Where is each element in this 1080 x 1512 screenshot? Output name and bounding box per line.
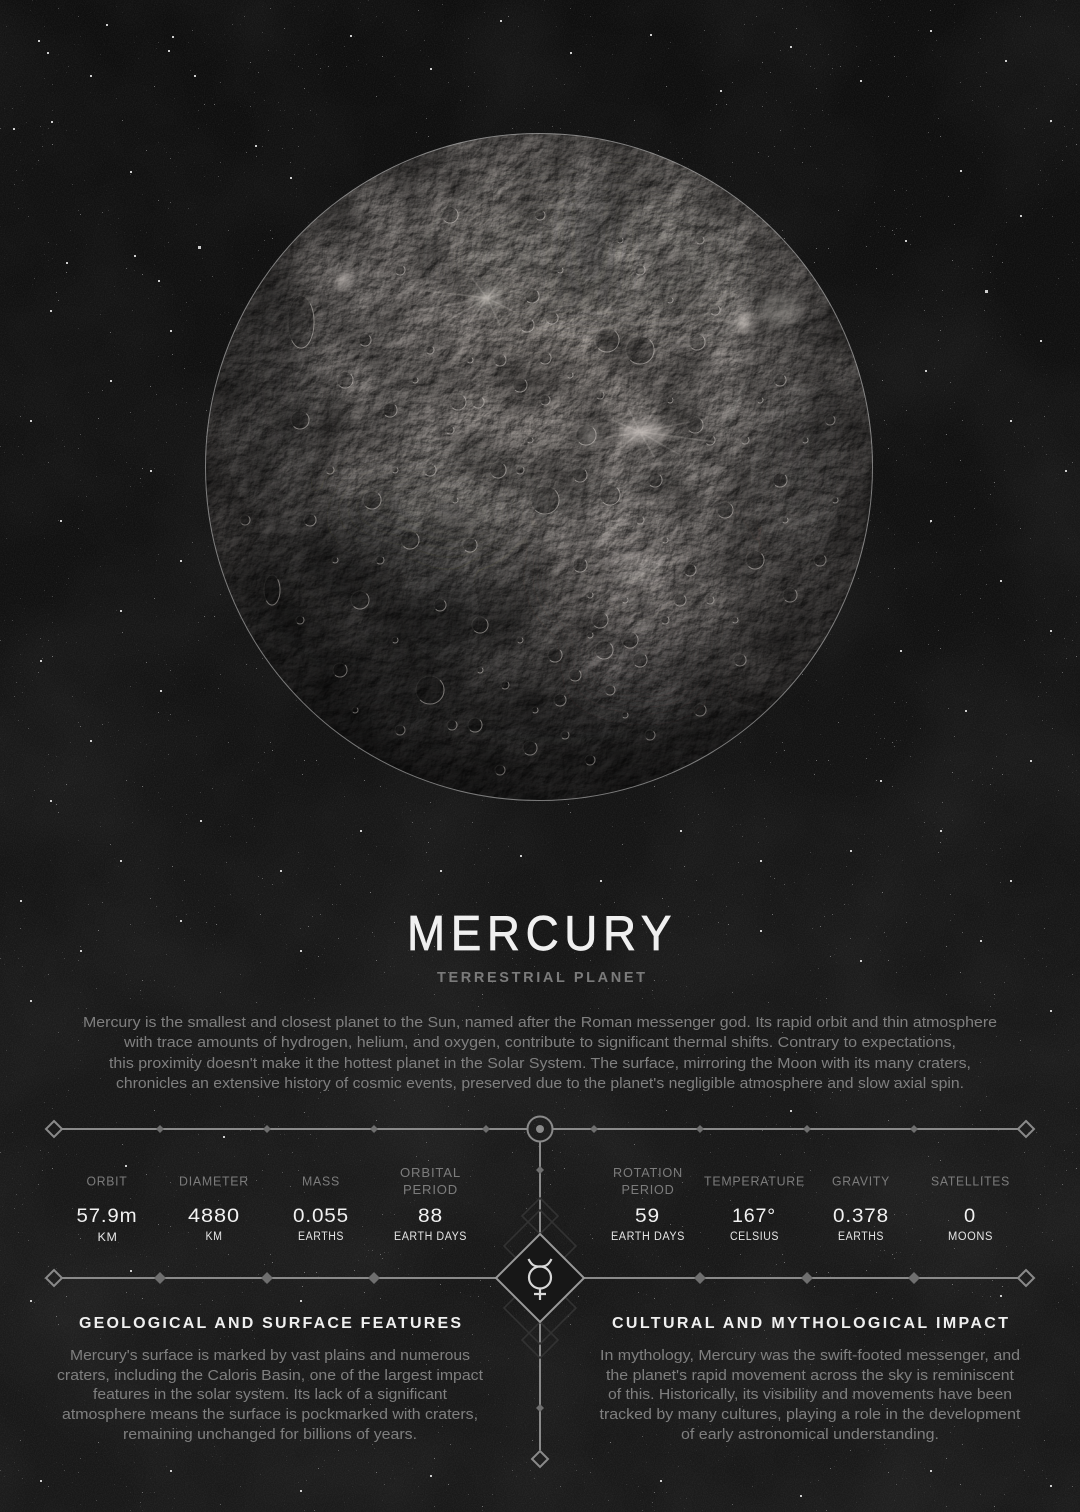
stat: orbital period: 88	[418, 1206, 443, 1227]
stat: temperature: TEMPERATURE	[704, 1174, 805, 1188]
stat: diameter: KM	[206, 1231, 222, 1243]
title: MERCURY	[407, 907, 677, 961]
text: cultural: In mythology, Mercury was the swift-footed messenger, and	[600, 1347, 1020, 1364]
stat: diameter	[179, 1174, 249, 1243]
intro paragraph: this proximity doesn't make it the hottest planet in the Solar System. The surface, mirroring the Moon with its many craters,	[109, 1055, 971, 1072]
text: cultural: the planet's rapid movement across the sky is reminiscent	[606, 1367, 1015, 1384]
divider frame with diamonds	[46, 1121, 1034, 1467]
stat: orbital period: PERIOD	[403, 1182, 458, 1197]
stat: diameter: DIAMETER	[179, 1174, 249, 1188]
stat: orbit: ORBIT	[86, 1174, 128, 1188]
stat: gravity: GRAVITY	[832, 1174, 890, 1188]
surface relief texture	[205, 133, 873, 801]
stat: rotation period	[611, 1165, 685, 1243]
stat: orbit: KM	[98, 1232, 118, 1244]
stat: mass: 0.055	[293, 1206, 349, 1227]
heading: cultural: CULTURAL AND MYTHOLOGICAL IMPACT	[612, 1315, 1008, 1332]
top centre circle node	[528, 1116, 552, 1142]
stat: rotation period: PERIOD	[622, 1182, 674, 1197]
stat: gravity: EARTHS	[838, 1231, 884, 1243]
stat: rotation period: EARTH DAYS	[611, 1231, 685, 1243]
stats left	[76, 1165, 467, 1244]
central diamond with Mercury symbol	[496, 1234, 584, 1322]
stat: rotation period: ROTATION	[613, 1165, 683, 1180]
bright ray systems	[410, 275, 715, 458]
surface mottling	[205, 133, 873, 801]
intro paragraph	[83, 1014, 997, 1092]
stat: orbital period	[394, 1165, 467, 1243]
text: geological: craters, including the Caloris Basin, one of the largest impact	[57, 1367, 484, 1384]
text: geological	[57, 1347, 484, 1443]
stat: satellites	[931, 1174, 1010, 1243]
text: cultural	[600, 1347, 1021, 1443]
stat: gravity	[832, 1174, 890, 1243]
intro paragraph: Mercury is the smallest and closest planet to the Sun, named after the Roman messenger god. Its rapid orbit and thin atmosphere	[83, 1014, 997, 1031]
stat: diameter: 4880	[188, 1206, 240, 1227]
text: cultural: of this. Historically, its visibility and movements have been	[608, 1386, 1012, 1403]
subtitle: TERRESTRIAL PLANET	[437, 970, 645, 986]
intro paragraph: with trace amounts of hydrogen, helium, and oxygen, contribute to significant thermal shifts. Contrary to expectations,	[123, 1034, 956, 1051]
text: cultural: of early astronomical understanding.	[681, 1426, 939, 1443]
stat: rotation period: 59	[635, 1206, 660, 1227]
stat: temperature	[704, 1174, 805, 1243]
stat: orbit	[76, 1174, 138, 1244]
text: geological: remaining unchanged for billions of years.	[123, 1426, 417, 1443]
stat: mass	[293, 1174, 349, 1243]
stat: orbital period: ORBITAL	[400, 1165, 461, 1180]
heading: geological: GEOLOGICAL AND SURFACE FEATURES	[79, 1315, 461, 1332]
intro paragraph: chronicles an extensive history of cosmic events, preserved due to the planet's negligible atmosphere and slow axial spin.	[116, 1075, 964, 1092]
stat: mass: EARTHS	[298, 1231, 344, 1243]
stat: orbit: 57.9m	[76, 1206, 138, 1227]
stat: orbital period: EARTH DAYS	[394, 1231, 467, 1243]
text: geological: Mercury's surface is marked by vast plains and numerous	[70, 1347, 470, 1364]
stats right	[611, 1165, 1010, 1243]
stat: temperature: 167°	[732, 1206, 776, 1227]
text: cultural: tracked by many cultures, playing a role in the development	[600, 1406, 1021, 1423]
stat: temperature: CELSIUS	[730, 1231, 779, 1243]
stat: satellites: MOONS	[948, 1231, 993, 1243]
text: geological: features in the solar system. Its lack of a significant	[93, 1386, 448, 1403]
stat: satellites: SATELLITES	[931, 1174, 1010, 1188]
impact craters	[240, 207, 838, 775]
planet Mercury	[205, 133, 873, 820]
text: geological: atmosphere means the surface is pockmarked with craters,	[62, 1406, 478, 1423]
stat: satellites: 0	[964, 1206, 976, 1227]
stat: gravity: 0.378	[833, 1206, 889, 1227]
planet rim	[206, 134, 872, 800]
stat: mass: MASS	[302, 1174, 340, 1188]
